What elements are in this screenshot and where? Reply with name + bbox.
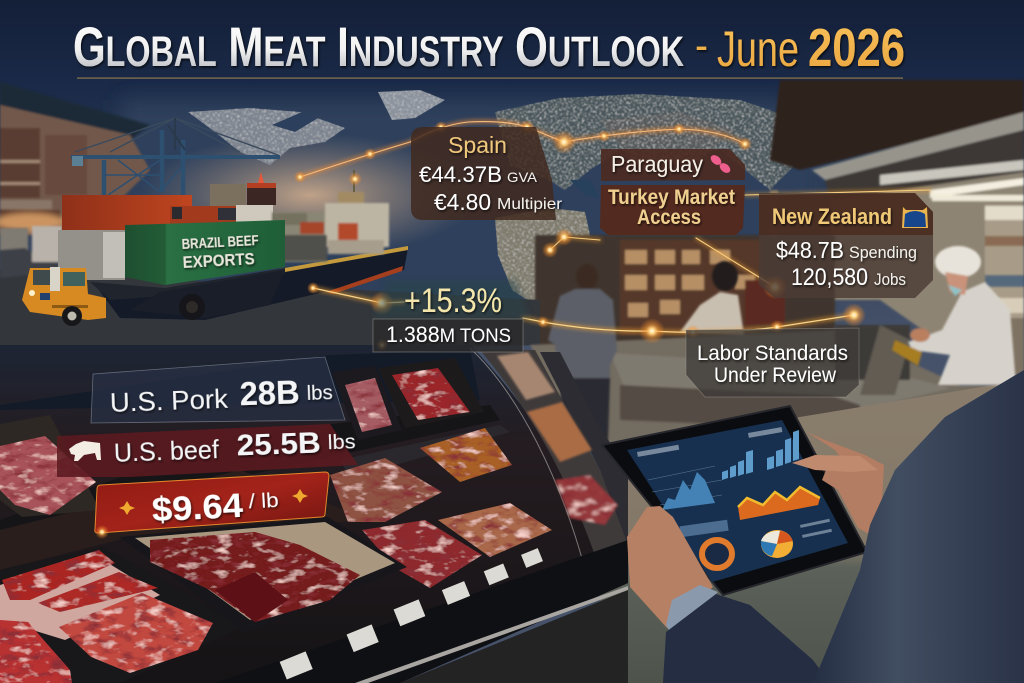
panel: U.S. beef (57, 424, 358, 477)
connector lines (300, 122, 930, 332)
crates on deck (210, 184, 246, 206)
suit body (813, 370, 1024, 683)
panel: U.S. pork (91, 357, 345, 423)
left grid tray (0, 415, 100, 517)
panel: labor standards: Under Review (714, 364, 837, 387)
panel: Spain: GVA (507, 169, 538, 185)
port scene (0, 118, 408, 326)
shelves (0, 405, 500, 575)
icon: star left (119, 501, 135, 515)
refrigerated meat display case (0, 345, 628, 683)
title: 2026 (808, 18, 905, 78)
center shop shelves (535, 235, 835, 355)
suit and hands (627, 370, 1024, 683)
left hand (627, 506, 713, 628)
floor (560, 380, 1024, 683)
panel: Turkey market access: Access (637, 206, 701, 229)
ship cargo (272, 192, 389, 262)
route line: upper (300, 122, 745, 177)
ship hull (95, 248, 408, 320)
orange truck (22, 267, 106, 326)
red container (62, 195, 192, 231)
panel: Spain (411, 127, 563, 220)
right trays behind glass (497, 352, 618, 525)
tablet with dashboard (602, 406, 867, 595)
label: Brazil beef exports: BRAZIL BEEF (181, 232, 259, 253)
panel: New Zealand: 120,580 (791, 264, 868, 291)
panel: Spain: Spain (448, 132, 507, 158)
trailer (90, 268, 285, 300)
tablet screen (627, 420, 848, 582)
quay ground (0, 270, 540, 360)
panel: price per pound: / lb (248, 490, 279, 513)
panel: Turkey market access (600, 185, 745, 235)
person: customer in grey shirt (548, 264, 617, 440)
glow points (294, 120, 866, 351)
title: - (695, 21, 708, 70)
bar charts (722, 430, 799, 480)
panel: Paraguay: Paraguay (611, 151, 703, 177)
title: GLOBAL MEAT INDUSTRY OUTLOOK (73, 15, 684, 78)
icon: New Zealand badge (902, 207, 928, 228)
large tray: left steaks (0, 547, 243, 683)
panel: labor standards (686, 328, 859, 397)
label: Brazil beef exports (181, 232, 260, 272)
panel: price per pound (95, 472, 329, 539)
panel: U.S. beef: 25.5B (236, 426, 321, 462)
pie chart (761, 530, 793, 558)
route line: lower (313, 288, 854, 332)
panel: New Zealand: $48.7B (776, 237, 844, 263)
world map backdrop (120, 90, 820, 330)
area chart: orange (738, 487, 820, 520)
panel: New Zealand (759, 193, 933, 298)
panel: Spain: €44.37B (419, 162, 502, 187)
panel: tonnage (373, 319, 523, 352)
icon: cow (69, 441, 101, 461)
green container (125, 220, 285, 285)
donut chart (680, 520, 732, 568)
large tray: center beef (119, 517, 407, 633)
stat: +15.3% with tonnage (373, 280, 530, 352)
panel: price per pound: $9.64 (151, 487, 244, 529)
panel: Turkey market access: Turkey Market (608, 186, 735, 209)
person: store worker (892, 246, 1016, 385)
right store interior (770, 80, 1024, 388)
panel: New Zealand: Spending (849, 243, 917, 262)
panel: labor standards: Labor Standards (697, 342, 848, 365)
store counter and floor (530, 325, 1024, 450)
grey container (58, 230, 125, 280)
route line: to store (550, 190, 930, 287)
panel: U.S. pork: 28B (239, 373, 300, 412)
icon: star right (292, 489, 308, 503)
crane (71, 118, 280, 196)
glass panes (480, 350, 628, 570)
label: Brazil beef exports: EXPORTS (182, 249, 255, 272)
suit sleeve (663, 594, 830, 683)
panel: U.S. beef: lbs (327, 431, 356, 454)
price rail and tags (215, 540, 628, 683)
panel: Spain: Multipier (497, 196, 563, 213)
panel: New Zealand: New Zealand (772, 204, 892, 229)
area chart: blue (648, 466, 722, 510)
icon: pink ribbon (709, 153, 732, 175)
left building (0, 82, 150, 235)
right hand (792, 432, 884, 540)
panel: tonnage: 1.388M TONS (386, 322, 511, 347)
person: man in white shirt (680, 261, 744, 335)
upper trays (332, 358, 484, 440)
parked cars (0, 226, 62, 278)
panel: U.S. beef: U.S. beef (113, 434, 220, 468)
middle trays (330, 428, 552, 588)
panel: Paraguay (601, 149, 745, 181)
panel: U.S. pork: lbs (306, 382, 333, 405)
panel: Spain: €4.80 (434, 189, 491, 215)
panel: New Zealand: Jobs (874, 270, 906, 289)
panel: U.S. pork: U.S. Pork (109, 384, 229, 418)
title: June (717, 21, 799, 77)
stat: +15.3% with tonnage: +15.3% (404, 282, 502, 320)
shirt cuff (666, 585, 718, 636)
